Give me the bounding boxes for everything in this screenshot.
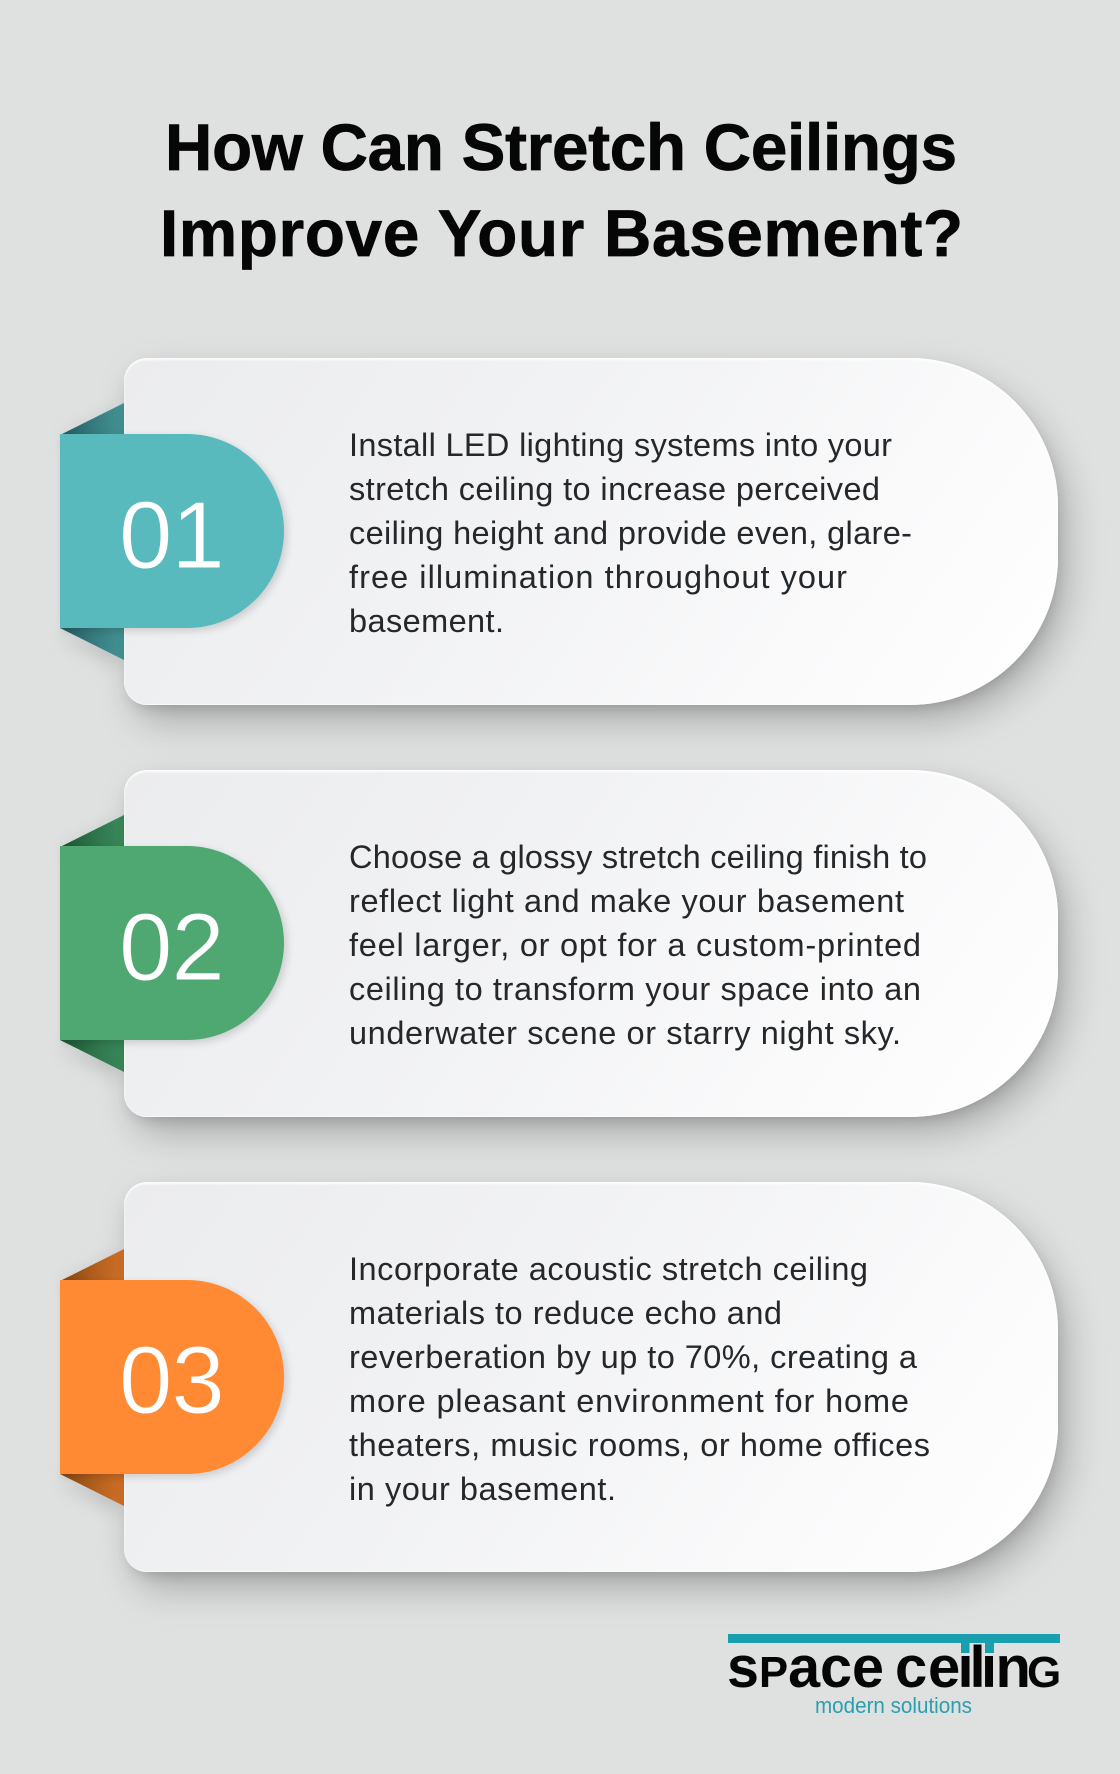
folded ribbon ends xyxy=(60,403,124,666)
step 03 text: in your basement. xyxy=(349,1471,616,1507)
card background xyxy=(124,358,1058,705)
logo bar xyxy=(728,1634,1060,1653)
logo wordmark: sPace xyxy=(727,1635,884,1700)
number badge xyxy=(60,846,284,1040)
step 03 text xyxy=(349,1251,930,1507)
step 03 text: more pleasant environment for home xyxy=(349,1383,909,1419)
panel: step 02 xyxy=(59,768,1085,1151)
step 01 text: basement. xyxy=(349,603,504,639)
step 03 text: materials to reduce echo and xyxy=(349,1295,782,1331)
step 02 text: feel larger, or opt for a custom-printed xyxy=(349,927,921,963)
step 02 text: reflect light and make your basement xyxy=(349,883,904,919)
logo wordmark xyxy=(727,1635,1061,1700)
step 02 text xyxy=(349,839,927,1051)
step 01 text: Install LED lighting systems into your xyxy=(349,427,892,463)
step 03 text: reverberation by up to 70%, creating a xyxy=(349,1339,918,1375)
number 02: 02 xyxy=(119,894,224,1001)
step 03 text: theaters, music rooms, or home offices xyxy=(349,1427,930,1463)
title xyxy=(160,111,963,270)
step 02 text: Choose a glossy stretch ceiling finish to xyxy=(349,839,927,875)
card background xyxy=(124,1182,1058,1572)
step 01 text: free illumination throughout your xyxy=(349,559,847,595)
step 01 text xyxy=(349,427,912,639)
panel: step 03 xyxy=(59,1180,1085,1606)
title: Improve Your Basement? xyxy=(160,197,963,270)
logo tagline: modern solutions xyxy=(815,1693,972,1718)
step 02 text: ceiling to transform your space into an xyxy=(349,971,921,1007)
number badge xyxy=(60,434,284,628)
logo wordmark: ceilinG xyxy=(895,1635,1061,1700)
step 03 text: Incorporate acoustic stretch ceiling xyxy=(349,1251,868,1287)
card background xyxy=(124,770,1058,1117)
number 01: 01 xyxy=(119,482,224,589)
step 02 text: underwater scene or starry night sky. xyxy=(349,1015,901,1051)
panel: step 01 xyxy=(59,356,1085,739)
title: How Can Stretch Ceilings xyxy=(165,111,957,184)
step 01 text: ceiling height and provide even, glare- xyxy=(349,515,912,551)
folded ribbon ends xyxy=(60,815,124,1078)
folded ribbon ends xyxy=(60,1249,124,1512)
number 03: 03 xyxy=(119,1327,224,1434)
number badge xyxy=(60,1280,284,1474)
step 01 text: stretch ceiling to increase perceived xyxy=(349,471,880,507)
